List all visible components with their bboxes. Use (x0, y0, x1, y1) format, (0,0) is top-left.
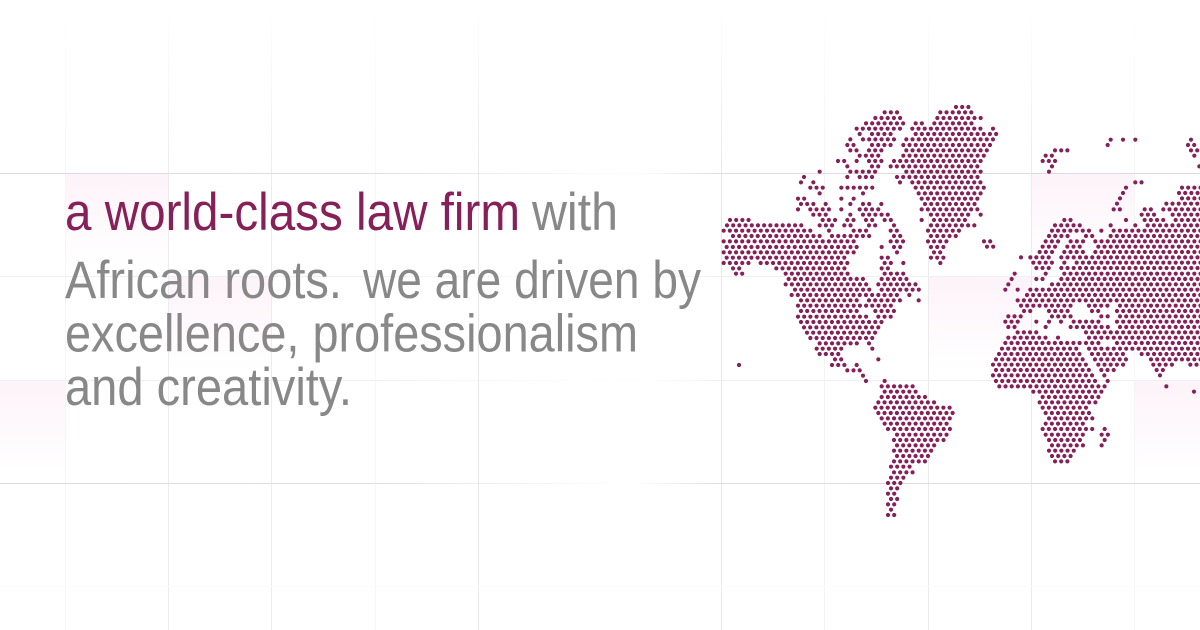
headline line 1: grey ending: with (531, 183, 618, 242)
map: southern Africa and Madagascar (999, 386, 1109, 461)
map: North and Central America (724, 247, 944, 381)
headline line 3: excellence, professionalism (65, 304, 638, 364)
headline line 4: and creativity. (65, 358, 352, 417)
map: Africa, Middle East and southern Asia (993, 274, 1200, 392)
map: South America (875, 386, 954, 515)
headline line 2: second sentence start: we are driven by (362, 251, 702, 310)
dotted world map (724, 107, 1200, 515)
map: northern Africa, Europe and Asia (987, 140, 1200, 268)
headline line 1: purple emphasis: a world-class law firm (65, 183, 520, 242)
headline text (65, 183, 702, 417)
map: Greenland, Arctic and northern Canada (724, 107, 997, 241)
headline line 2: first sentence end: African roots. (65, 251, 342, 310)
